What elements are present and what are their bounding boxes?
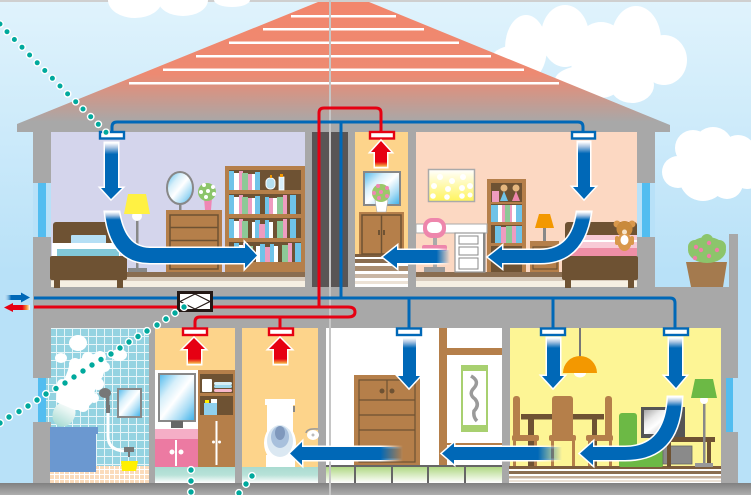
house structure: grey walls and floors (33, 132, 738, 483)
exhaust air ducts: red (34, 108, 381, 328)
blue supply arrows: horizontal fading (290, 246, 562, 465)
airflow dots: bottom centre (188, 467, 194, 495)
floor stripes (355, 254, 408, 287)
mirror (118, 389, 141, 417)
sofa (619, 413, 663, 467)
panel: Japanese-style room (326, 328, 502, 483)
heat exchange ventilator unit (177, 291, 213, 312)
top edge line (0, 0, 751, 2)
wooden post and beam (439, 328, 502, 467)
ground band (0, 483, 751, 495)
hanging scroll (461, 365, 488, 432)
airflow dots: bottom toilet (236, 473, 255, 495)
floor lamp (124, 194, 150, 272)
windows in side walls (33, 183, 738, 432)
toilet (264, 399, 296, 467)
teddy bear (614, 220, 636, 251)
steam (48, 335, 127, 431)
divider between upper rooms (408, 132, 416, 287)
TV stand (658, 437, 715, 467)
window (364, 172, 400, 205)
cloud: right lower (662, 127, 751, 201)
mirror (159, 374, 195, 421)
floor (51, 272, 305, 287)
central dark shaft (312, 132, 348, 287)
bookcase (225, 166, 305, 272)
roof (17, 2, 670, 132)
storage shelf (198, 370, 235, 467)
dining table (521, 414, 604, 466)
bucket (121, 461, 138, 471)
dresser (166, 210, 222, 272)
green floor lamp (691, 379, 717, 467)
panel: upper middle room (355, 132, 408, 287)
panel: upper right child room (415, 132, 638, 288)
pendant lamp (563, 328, 597, 378)
cloud: top right behind roof (490, 5, 687, 103)
sink cabinet (155, 429, 200, 467)
panel: washroom (155, 328, 235, 483)
panel: bathroom (46, 328, 149, 483)
desk and chair (416, 218, 487, 272)
panel: dining and living room (509, 328, 721, 483)
red exhaust arrows (183, 141, 391, 364)
balcony plant (686, 234, 727, 287)
chest of drawers (354, 375, 420, 465)
tatami floor (326, 465, 502, 483)
shower (99, 388, 134, 457)
oval mirror (167, 172, 193, 211)
cloud: top left (108, 0, 250, 18)
supply air ducts: blue (34, 122, 675, 328)
ceiling vents: blue (100, 132, 688, 335)
bathtub (50, 427, 98, 472)
flower pot (372, 184, 390, 212)
vertical centre seam line (329, 0, 331, 495)
cabinet (359, 212, 404, 254)
picture (428, 170, 474, 202)
dining chairs (512, 396, 613, 466)
television (641, 407, 685, 438)
blue supply arrows: downward (101, 142, 686, 388)
floor (509, 466, 721, 483)
floor (155, 467, 235, 483)
airflow dots: lower left diagonal (0, 304, 187, 426)
ceiling vents: red (183, 132, 394, 335)
bookcase with dolls (487, 179, 526, 272)
panel: toilet room (242, 328, 319, 483)
flower vase (198, 183, 216, 210)
airflow dots: upper left diagonal (0, 21, 109, 135)
floor (415, 272, 637, 287)
bed (50, 222, 127, 288)
outdoor air arrows (3, 292, 30, 312)
blue supply arrows: curved (105, 212, 682, 465)
panel: upper left bedroom (50, 132, 305, 288)
nightstand and lamp (530, 214, 559, 272)
toilet paper holder (306, 429, 319, 440)
pink bed (562, 222, 638, 288)
